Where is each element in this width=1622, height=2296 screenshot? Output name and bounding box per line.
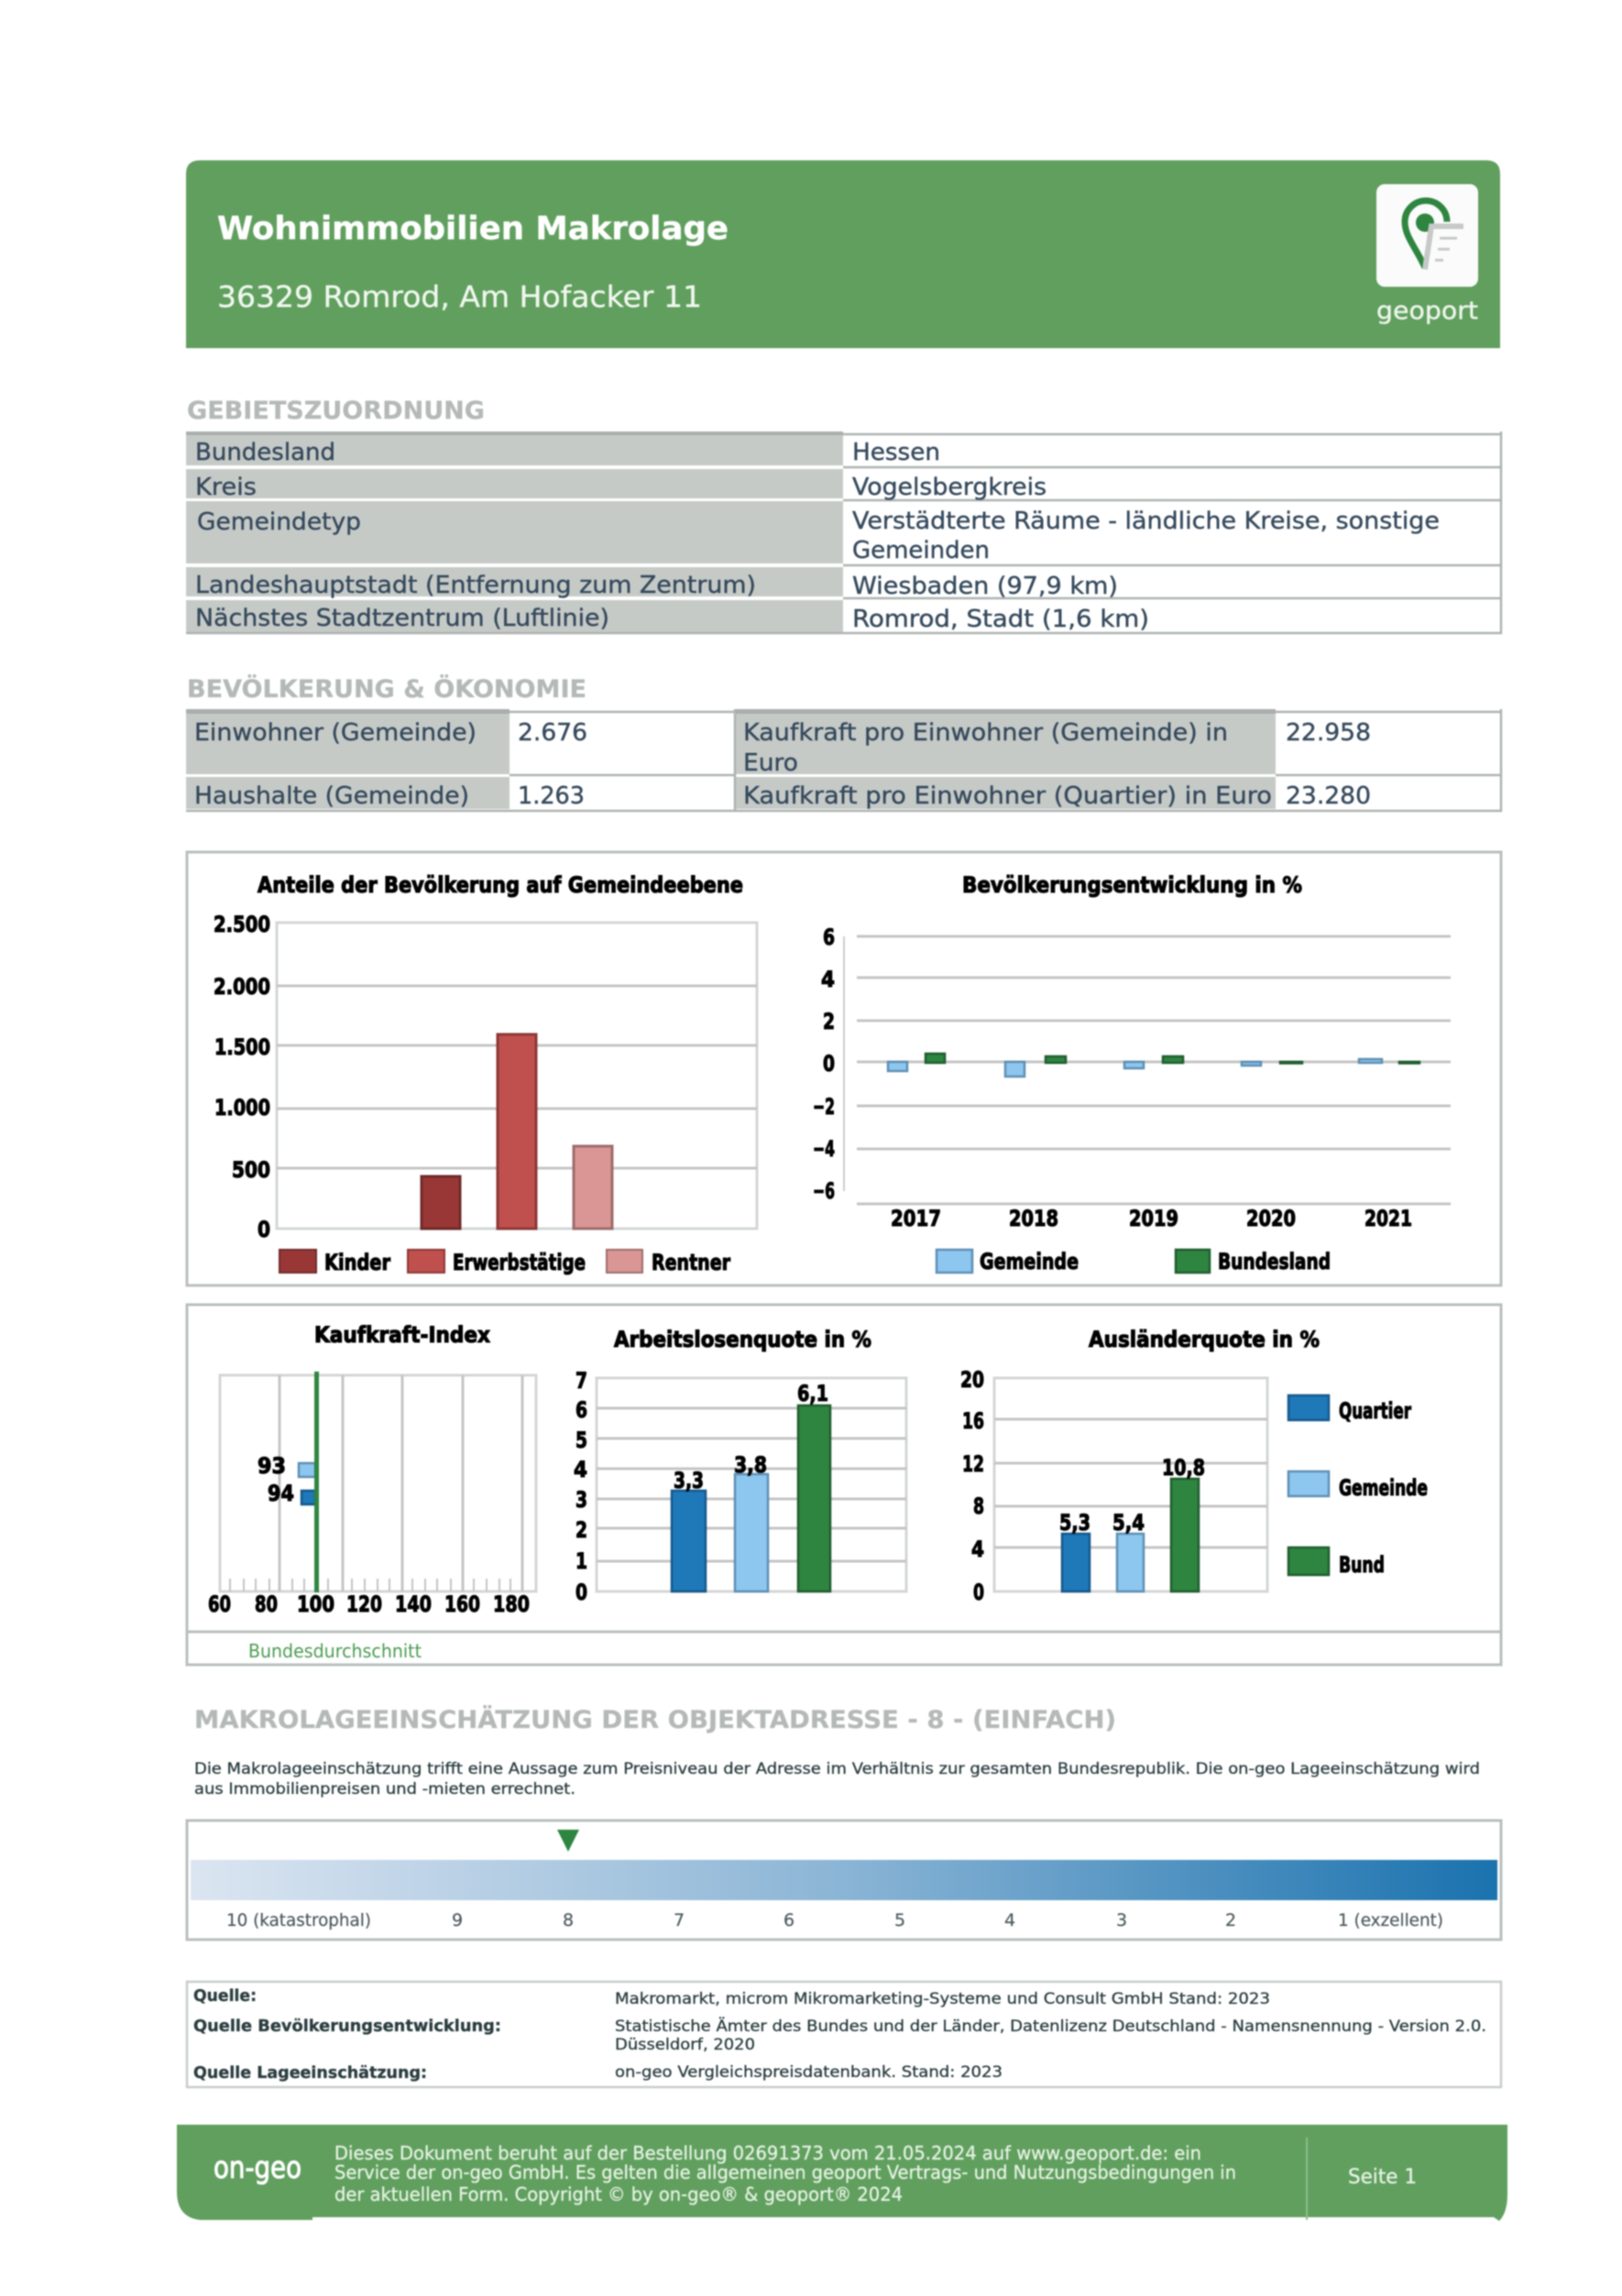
bars [422,1034,612,1229]
icon: geoport logo [1376,184,1478,325]
value labels [258,1453,294,1506]
right labels and values: Kaufkraft pro Einwohner (Gemeinde) in [743,719,1228,747]
right labels and values: Kaufkraft pro Einwohner (Quartier) in Euro [743,782,1272,810]
row labels [195,439,756,632]
y axis labels [960,1367,984,1605]
left labels and values: Haushalte (Gemeinde) [194,782,469,810]
y axis labels: 1 [575,1548,587,1574]
chart title: Ausländerquote in % [1089,1327,1320,1352]
chart title: Bevölkerungsentwicklung in % [962,872,1302,898]
scale labels: 8 [563,1910,574,1930]
source values: on-geo Vergleichspreisdatenbank. Stand: 2023 [615,2063,1003,2082]
scale labels: 5 [894,1910,905,1930]
right labels and values: Euro [743,749,798,777]
scale labels: 1 (exzellent) [1338,1910,1443,1930]
heading: Makrolageeinschätzung: MAKROLAGEEINSCHÄTZUNG DER OBJEKTADRESSE - 8 - (EINFACH) [194,1705,1116,1734]
page number: Seite 1 [1348,2166,1417,2189]
scale labels: 9 [452,1910,463,1930]
legend [1288,1395,1428,1578]
y axis labels: 0 [258,1217,270,1242]
panel: rating scale [187,1820,1501,1940]
y axis labels [214,912,270,1242]
row labels: Kreis [195,474,257,501]
y axis labels: 1.500 [214,1034,270,1060]
panel: population charts [187,852,1501,1285]
legend: Bund [1339,1552,1385,1578]
y axis labels: 16 [962,1408,984,1434]
scale labels: 7 [674,1910,685,1930]
table: Bevölkerung und Ökonomie [186,709,1502,812]
source values: Makromarkt, microm Mikromarketing-Systeme und Consult GmbH Stand: 2023 [615,1990,1270,2008]
x axis labels: 60 [208,1591,231,1617]
y axis labels: 2 [575,1517,587,1543]
y axis labels: 4 [971,1536,984,1562]
source values: Statistische Ämter des Bundes und der Länder, Datenlizenz Deutschland - Namensnennung - Version 2.0. [615,2017,1486,2036]
y axis labels: 1.000 [214,1095,270,1121]
row labels: Landeshauptstadt (Entfernung zum Zentrum) [195,572,756,599]
scale labels: 6 [784,1910,795,1930]
x axis labels: 160 [444,1591,480,1617]
text block: Makrolage description [194,1760,1480,1799]
bars [672,1405,830,1591]
left labels and values: Einwohner (Gemeinde) [194,719,477,747]
source labels [193,1986,501,2083]
legend: Erwerbstätige [453,1250,586,1275]
table: Gebietszuordnung [186,432,1502,634]
row labels: Bundesland [195,439,335,466]
bars [1062,1479,1199,1591]
legend: Quartier [1339,1398,1411,1424]
y axis labels: −2 [813,1094,835,1120]
footer notice: Service der on-geo GmbH. Es gelten die allgemeinen geoport Vertrags- und Nutzungsbedingungen in [334,2161,1236,2183]
footer banner [177,2125,1507,2221]
value labels [674,1381,828,1493]
y axis labels: 20 [960,1367,984,1393]
source values [615,1990,1486,2082]
x axis labels [208,1591,530,1617]
x axis labels: 2019 [1129,1206,1178,1231]
legend: Gemeinde [1339,1475,1428,1501]
x axis labels [891,1206,1412,1231]
legend: Bundesland [1218,1249,1331,1274]
value labels: 5,3 [1059,1510,1090,1536]
left labels and values [194,719,587,810]
y axis labels: 4 [821,967,835,992]
legend: Gemeinde [980,1249,1079,1274]
legend [279,1250,730,1275]
value labels: 5,4 [1112,1510,1145,1536]
row values: Verstädterte Räume - ländliche Kreise, sonstige [852,508,1440,535]
text block: Makrolage description: Die Makrolageeinschätzung trifft eine Aussage zum Preisniveau der Adresse im Verhältnis zur gesamten Bundesrepublik. Die on-geo Lageeinschätzung wird [194,1760,1480,1778]
y axis labels: −4 [813,1136,835,1162]
scale labels [226,1910,1443,1930]
x axis labels: 2020 [1246,1206,1296,1231]
arrow: rating marker [557,1830,579,1852]
bar chart: Bevölkerungsentwicklung [813,872,1451,1274]
y axis labels: 5 [575,1427,587,1453]
chart title: Arbeitslosenquote in % [614,1327,871,1352]
Gemeinde bars [888,1059,1382,1077]
heading: Gebietszuordnung: GEBIETSZUORDNUNG [187,397,485,425]
row labels: Gemeindetyp [197,508,361,536]
value labels: 10,8 [1162,1455,1205,1481]
right labels and values: 23.280 [1286,782,1371,810]
x axis labels: 80 [255,1591,278,1617]
y axis labels: 0 [973,1580,984,1605]
y axis labels: 3 [575,1487,587,1513]
Bundesland bars [926,1054,1419,1063]
y axis labels: 0 [575,1580,587,1605]
title: Wohnimmobilien Makrolage [217,211,729,247]
y axis labels: 4 [574,1457,587,1482]
on-geo logo: on-geo [214,2149,301,2185]
row values: Gemeinden [852,537,990,564]
row values: Vogelsbergkreis [852,474,1047,501]
chart title: Kaufkraft-Index [314,1322,490,1348]
legend: Rentner [652,1250,730,1275]
panel: sources [187,1982,1501,2087]
x axis labels: 140 [395,1591,432,1617]
x axis labels: 120 [346,1591,382,1617]
y axis labels: 0 [823,1051,835,1077]
value labels: 3,3 [674,1468,704,1493]
right labels and values [743,719,1371,810]
row labels: Nächstes Stadtzentrum (Luftlinie) [195,605,609,632]
y axis labels: −6 [813,1178,835,1204]
chart title: Anteile der Bevölkerung auf Gemeindeebene [258,872,743,898]
value labels: 94 [268,1481,294,1506]
address subtitle: 36329 Romrod, Am Hofacker 11 [217,279,702,314]
y axis labels: 6 [575,1397,587,1423]
source values: Düsseldorf, 2020 [615,2036,755,2054]
legend: Kinder [324,1250,390,1275]
row values [852,439,1440,633]
bars [299,1463,315,1504]
reference line: Bundesdurchschnitt [314,1372,319,1592]
y axis labels [813,924,835,1204]
legend [937,1249,1331,1274]
footer notice: Dieses Dokument beruht auf der Bestellung 02691373 vom 21.05.2024 auf www.geoport.de: ein [334,2142,1201,2164]
left labels and values: 1.263 [518,782,585,810]
icon: geoport logo: geoport [1376,297,1478,325]
value labels: 93 [258,1453,286,1479]
footer notice: der aktuellen Form. Copyright © by on-geo® & geoport® 2024 [334,2183,903,2205]
x axis labels: 2021 [1364,1206,1412,1231]
scale labels: 3 [1116,1910,1127,1930]
value labels: 6,1 [797,1381,828,1406]
source labels: Quelle Lageeinschätzung: [193,2063,427,2083]
source labels: Quelle: [193,1986,257,2006]
footer notice [334,2142,1236,2205]
heading: Bevölkerung und Ökonomie: BEVÖLKERUNG & ÖKONOMIE [187,673,586,704]
bar chart: Arbeitslosenquote [574,1327,906,1605]
row values: Wiesbaden (97,9 km) [852,573,1118,600]
x axis labels: 2018 [1009,1206,1058,1231]
row values: Hessen [852,439,940,466]
y axis labels: 2 [823,1009,835,1034]
gradient bar [191,1860,1497,1900]
y axis labels: 7 [575,1368,587,1394]
scale labels: 10 (katastrophal) [226,1910,371,1930]
bar chart: Ausländerquote [960,1327,1428,1605]
y axis labels: 12 [962,1451,984,1477]
value labels [1059,1455,1205,1536]
scale labels: 2 [1225,1910,1236,1930]
y axis labels: 8 [973,1493,984,1519]
note: Bundesdurchschnitt: Bundesdurchschnitt [248,1640,422,1662]
source labels: Quelle Bevölkerungsentwicklung: [193,2017,501,2036]
panel: index and quota charts [187,1305,1501,1665]
row values: Romrod, Stadt (1,6 km) [852,606,1149,633]
x axis labels: 2017 [891,1206,941,1231]
scale labels: 4 [1004,1910,1015,1930]
value labels: 3,8 [734,1452,767,1478]
bar chart: Anteile der Bevölkerung [214,872,757,1275]
x axis labels: 100 [297,1591,334,1617]
y axis labels: 500 [232,1157,270,1183]
y axis labels: 6 [823,924,835,950]
right labels and values: 22.958 [1286,719,1371,747]
header banner [186,160,1500,348]
y axis labels: 2.500 [214,912,270,937]
y axis labels [574,1368,587,1605]
y axis labels: 2.000 [214,974,270,1000]
x axis labels: 180 [493,1591,530,1617]
chart: Kaufkraft-Index [208,1322,536,1662]
left labels and values: 2.676 [518,719,587,747]
text block: Makrolage description: aus Immobilienpreisen und -mieten errechnet. [194,1780,575,1799]
